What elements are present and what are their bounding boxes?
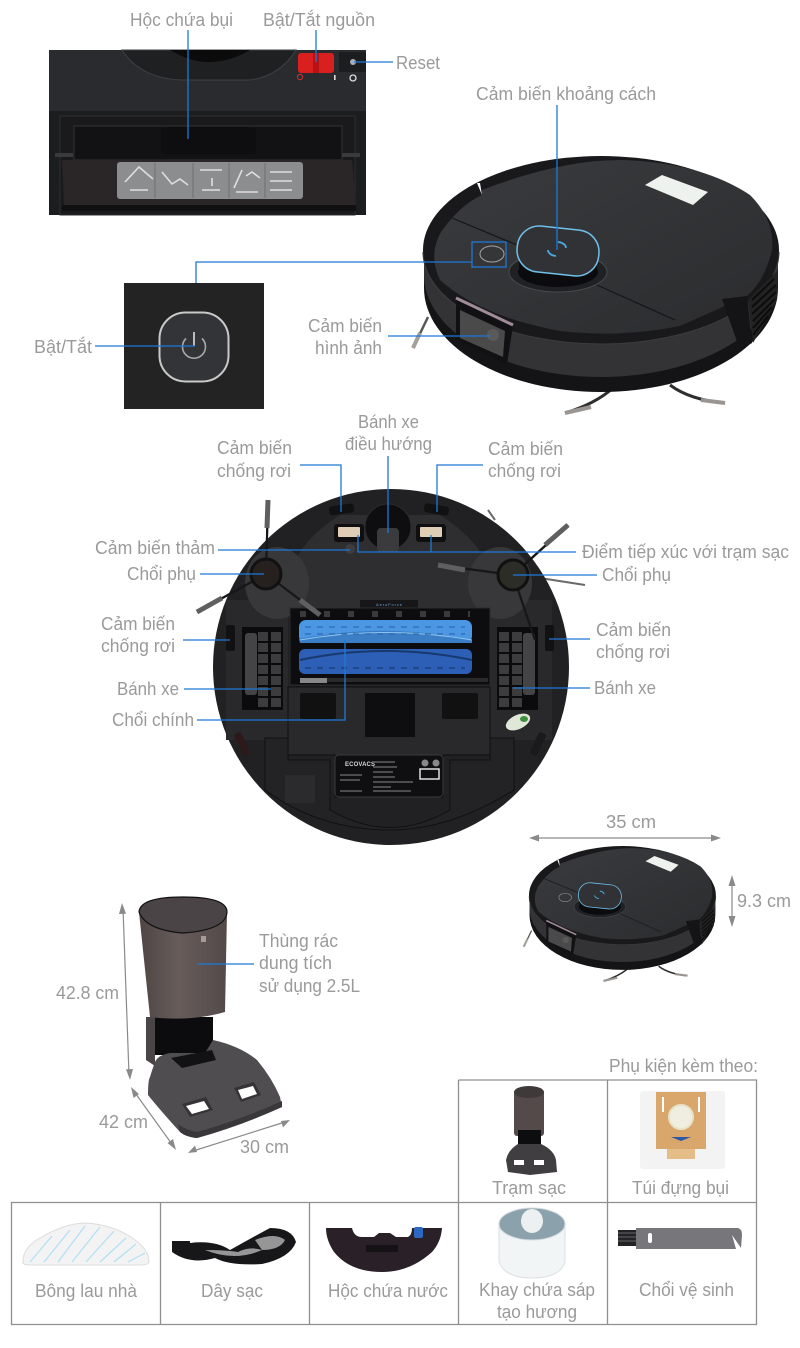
callout labels: dung tích xyxy=(259,953,332,973)
callout labels: chống rơi xyxy=(596,642,670,662)
callout labels: chống rơi xyxy=(101,636,175,656)
accessory: power cord xyxy=(172,1228,296,1301)
dock station photo xyxy=(139,897,282,1138)
small robot photo xyxy=(524,846,716,981)
callout labels: Cảm biến xyxy=(308,316,382,336)
callout labels: Cảm biến thảm xyxy=(95,538,215,558)
side brushes xyxy=(197,500,568,640)
callout labels: Hộc chứa bụi xyxy=(130,10,233,30)
accessories table grid xyxy=(12,1080,756,1324)
callout labels: Bánh xe xyxy=(358,412,419,432)
right wheel xyxy=(497,627,538,710)
bottom view robot xyxy=(197,489,585,845)
label sticker: ECOVACS xyxy=(345,762,375,768)
callout labels: Chổi phụ xyxy=(127,564,196,584)
panel: dust bin photo xyxy=(49,50,366,215)
callout labels: chống rơi xyxy=(217,461,291,481)
heading: included accessories: Phụ kiện kèm theo: xyxy=(609,1056,758,1076)
callout labels: hình ảnh xyxy=(315,338,382,358)
callout labels: Cảm biến xyxy=(101,614,175,634)
main brush chamber xyxy=(290,608,490,685)
green sticker xyxy=(503,710,533,734)
dimension: robot width and height: 35 cm xyxy=(606,812,656,832)
panel: power button photo xyxy=(124,283,264,409)
reset pinhole xyxy=(339,52,366,81)
cliff sensors xyxy=(226,503,554,757)
front caster wheel xyxy=(365,504,411,552)
callout labels: Chổi phụ xyxy=(602,565,671,585)
left wheel xyxy=(242,627,283,710)
accessory: cleaning brush: Chổi vệ sinh xyxy=(639,1280,734,1300)
dimension: robot width and height: 9.3 cm xyxy=(737,891,791,911)
accessory: mop pad: Bông lau nhà xyxy=(35,1281,138,1301)
callout labels: Bánh xe xyxy=(594,678,656,698)
leader lines xyxy=(95,30,597,964)
bottom view robot: AeroForce xyxy=(376,602,403,607)
callout labels: Bật/Tắt nguồn xyxy=(263,9,375,30)
callout labels: Reset xyxy=(396,53,440,73)
accessory: charging dock xyxy=(492,1086,566,1198)
callout labels: Cảm biến xyxy=(596,620,671,640)
callout labels: Điểm tiếp xúc với trạm sạc xyxy=(582,542,789,562)
callout labels: Cảm biến xyxy=(488,439,563,459)
callout labels: Bật/Tắt xyxy=(34,336,92,357)
callout labels: Chổi chính xyxy=(112,710,194,730)
accessory: scent tray: tạo hương xyxy=(497,1302,577,1322)
label sticker xyxy=(335,755,443,797)
rear compartment xyxy=(265,738,514,830)
accessory: power cord: Dây sạc xyxy=(201,1281,263,1301)
accessory: water tank xyxy=(326,1227,448,1301)
dimension: dock height, depth and width: 30 cm xyxy=(240,1137,289,1157)
accessory: mop pad xyxy=(23,1223,149,1301)
accessory: charging dock: Trạm sạc xyxy=(492,1178,566,1198)
lower plate xyxy=(288,687,490,797)
dimension: dock height, depth and width: 42.8 cm xyxy=(56,983,119,1003)
accessory: water tank: Hộc chứa nước xyxy=(328,1281,448,1301)
sticker xyxy=(117,162,303,199)
callout labels: điều hướng xyxy=(345,434,432,454)
callout labels: sử dụng 2.5L xyxy=(259,976,360,996)
dimension: dock height, depth and width xyxy=(56,903,290,1157)
main robot photo xyxy=(413,156,779,413)
callout labels: Bánh xe xyxy=(117,679,179,699)
callout labels: Cảm biến xyxy=(217,438,292,458)
callout labels: chống rơi xyxy=(488,461,561,481)
charging contacts xyxy=(334,524,446,554)
callout labels: Cảm biến khoảng cách xyxy=(476,84,656,104)
accessory: scent tray: Khay chứa sáp xyxy=(479,1280,595,1300)
dimension: dock height, depth and width: 42 cm xyxy=(99,1112,148,1132)
accessory: dust bag xyxy=(632,1091,729,1198)
callout labels: Thùng rác xyxy=(259,931,338,951)
accessory: dust bag: Túi đựng bụi xyxy=(632,1178,729,1198)
accessory: scent tray xyxy=(479,1208,595,1322)
dimension: robot width and height xyxy=(529,812,791,927)
accessory: cleaning brush xyxy=(618,1228,742,1300)
power switch xyxy=(297,53,336,80)
callout labels xyxy=(34,9,789,996)
